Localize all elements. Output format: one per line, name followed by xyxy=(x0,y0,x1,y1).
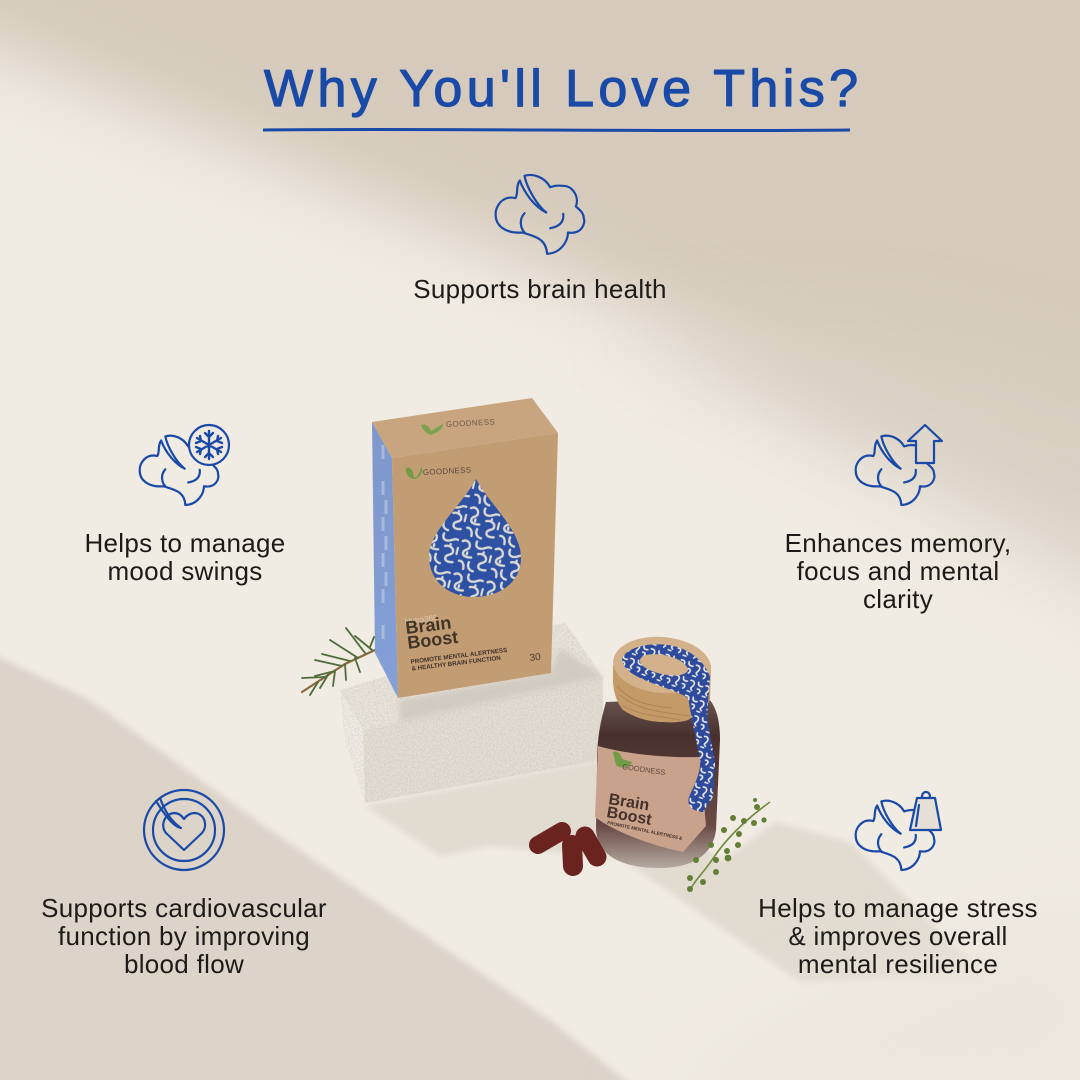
text: cardiovascular: blood flow xyxy=(124,949,244,979)
blue sticker strip xyxy=(622,644,715,812)
box product name xyxy=(404,605,508,673)
box product name: Nutra365 xyxy=(404,613,439,626)
jar label: Boost xyxy=(605,804,654,829)
text: mood swings: mood swings xyxy=(107,556,263,586)
icon: brain with snowflake xyxy=(140,425,229,505)
text: memory: Enhances memory, xyxy=(785,528,1011,558)
text: stress: Helps to manage stress xyxy=(758,893,1038,923)
blue patterned drop xyxy=(429,479,521,597)
title: Why You'll Love This? xyxy=(264,60,858,118)
icon: brain with weight xyxy=(856,792,941,870)
text: stress: & improves overall xyxy=(788,921,1008,951)
icon: brain xyxy=(496,175,584,254)
text: memory: focus and mental xyxy=(797,556,999,586)
text: stress: mental resilience xyxy=(798,949,998,979)
sprig: left xyxy=(302,628,375,695)
box logo front xyxy=(406,465,472,479)
text: cardiovascular: Supports cardiovascular xyxy=(41,893,327,923)
text: memory: clarity xyxy=(863,584,933,614)
text: supports brain health: Supports brain health xyxy=(413,274,667,304)
box logo front: GOODNESS xyxy=(423,465,472,477)
box product name: PROMOTE MENTAL ALERTNESS xyxy=(410,647,508,666)
box logo top: GOODNESS xyxy=(446,417,495,429)
jar label: Brain xyxy=(607,791,650,814)
sprig: right xyxy=(687,798,770,892)
box logo top xyxy=(421,417,495,435)
product box xyxy=(372,398,558,698)
jar body xyxy=(596,698,720,868)
jar label: PROMOTE MENTAL ALERTNESS & xyxy=(607,820,684,841)
jar label xyxy=(595,746,706,852)
text: mood swings: Helps to manage xyxy=(84,528,286,558)
icon: heart in circles xyxy=(144,790,224,870)
soft gel capsules xyxy=(538,831,597,866)
text: cardiovascular: function by improving xyxy=(58,921,310,951)
wooden lid xyxy=(611,633,713,722)
pill bottle xyxy=(595,633,720,868)
icon: brain with up arrow xyxy=(856,425,942,505)
box product name: Boost xyxy=(406,627,459,653)
box product name: Brain xyxy=(404,613,452,638)
box count: 30 xyxy=(529,652,542,664)
box product name: & HEALTHY BRAIN FUNCTION xyxy=(411,655,502,673)
jar label: GOODNESS xyxy=(622,762,666,777)
stone block xyxy=(340,622,603,803)
